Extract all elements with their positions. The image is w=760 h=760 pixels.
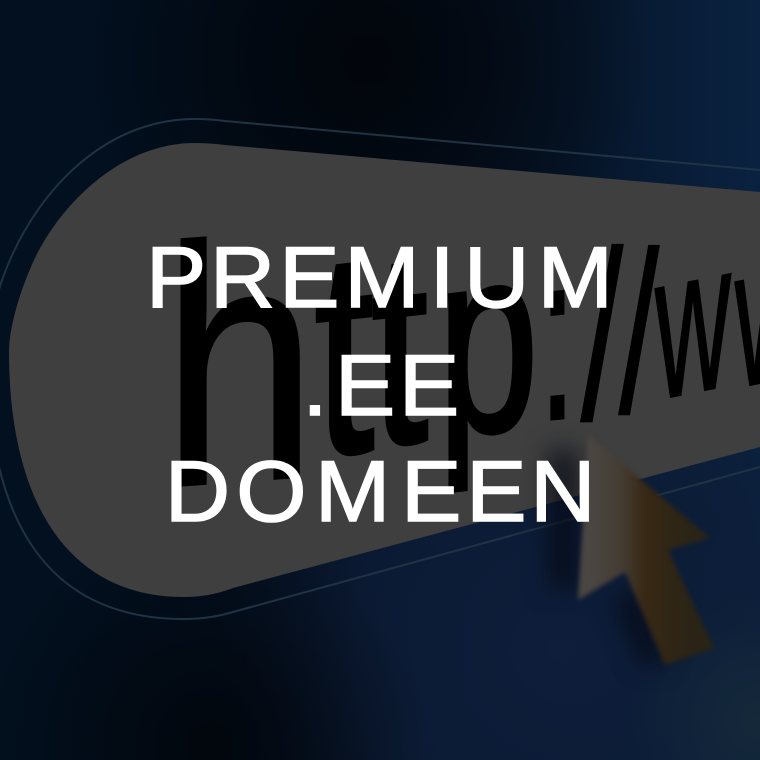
url text: t <box>371 191 428 505</box>
title line: DOMEEN: DOMEEN <box>165 443 595 540</box>
url text: h <box>162 168 317 559</box>
url text: t <box>314 188 375 518</box>
address bar outline <box>0 119 760 619</box>
address bar fill <box>9 143 760 597</box>
url text: p <box>438 186 538 494</box>
title line: .EE: .EE <box>302 337 459 434</box>
url text: / <box>580 201 624 472</box>
cursor arrow <box>578 435 714 665</box>
url text: w <box>654 196 731 445</box>
cursor shadow <box>548 450 668 665</box>
url text <box>162 168 760 559</box>
url text: : <box>537 196 578 474</box>
url text: / <box>618 204 660 463</box>
title line: PREMIUM: PREMIUM <box>146 229 613 326</box>
